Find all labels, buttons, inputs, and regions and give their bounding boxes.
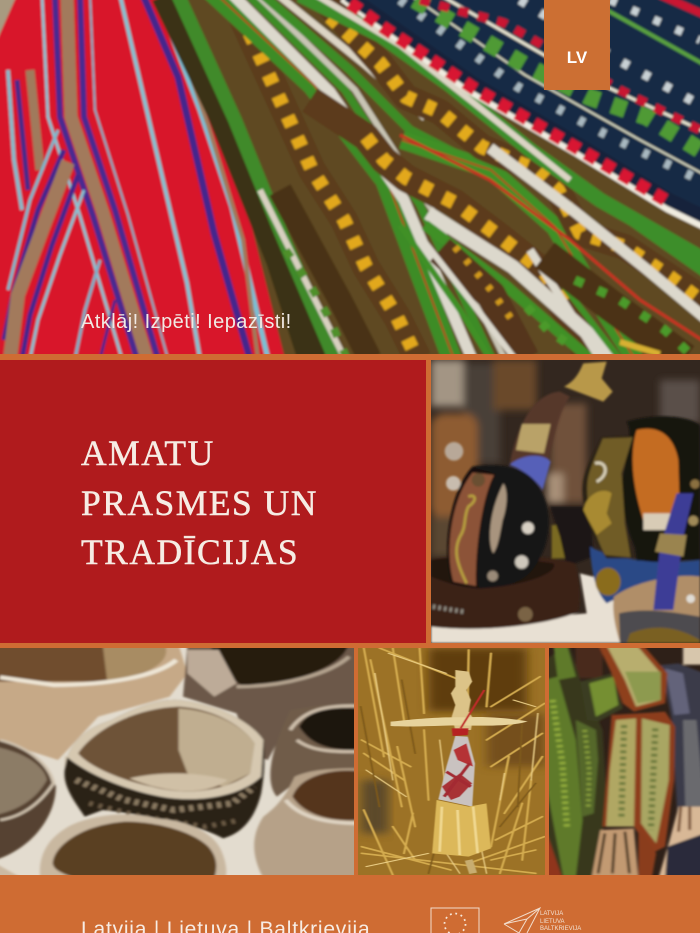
- blue bracelet: [590, 547, 700, 603]
- photo: straw doll in wheat: [358, 648, 545, 932]
- language tab: [544, 0, 610, 90]
- panel: title background: [0, 360, 426, 643]
- foreground cup: [613, 576, 700, 643]
- tagline: Atklāj! Izpēti! Iepazīsti!: [81, 311, 292, 333]
- photo: woven striped textiles: [0, 0, 700, 354]
- centre bowl: [64, 700, 264, 838]
- top bowl right: [183, 645, 358, 760]
- fringes: [591, 828, 638, 878]
- logo text: LATVIJA: [540, 911, 563, 917]
- right mid bowl: [270, 705, 358, 797]
- title: AMATU: [81, 433, 215, 473]
- title: PRASMES UN: [81, 482, 318, 522]
- left bracelet ring: [472, 465, 549, 588]
- footer: [0, 875, 700, 933]
- left green band: [545, 645, 607, 878]
- photo: woven belts: [549, 648, 700, 875]
- label: LV: LV: [567, 48, 587, 67]
- background blurred bracelet: [510, 392, 570, 488]
- logo text: BALTKRIEVIJA: [540, 926, 581, 932]
- table: [431, 573, 620, 643]
- logo: EU flag: [430, 908, 480, 933]
- top orange band: [598, 645, 667, 712]
- title: TRADĪCIJAS: [81, 532, 299, 572]
- logo: programme mark: [504, 907, 541, 933]
- right bracelet ring: [622, 416, 700, 562]
- doll: [451, 670, 473, 730]
- small fold: [553, 645, 576, 680]
- right blue-gray band: [661, 663, 700, 837]
- left bowl: [0, 740, 56, 860]
- photo: leather bracelets: [431, 360, 700, 643]
- title: [81, 433, 318, 572]
- top bowl left: [0, 645, 187, 760]
- centre band: [603, 712, 675, 853]
- logo text: LIETUVA: [540, 918, 565, 924]
- bottom bowl: [40, 814, 226, 878]
- bottom right bowl: [254, 768, 358, 878]
- logo text: [540, 910, 582, 932]
- flat strap: [431, 555, 580, 629]
- photo: felted bowls: [0, 648, 354, 875]
